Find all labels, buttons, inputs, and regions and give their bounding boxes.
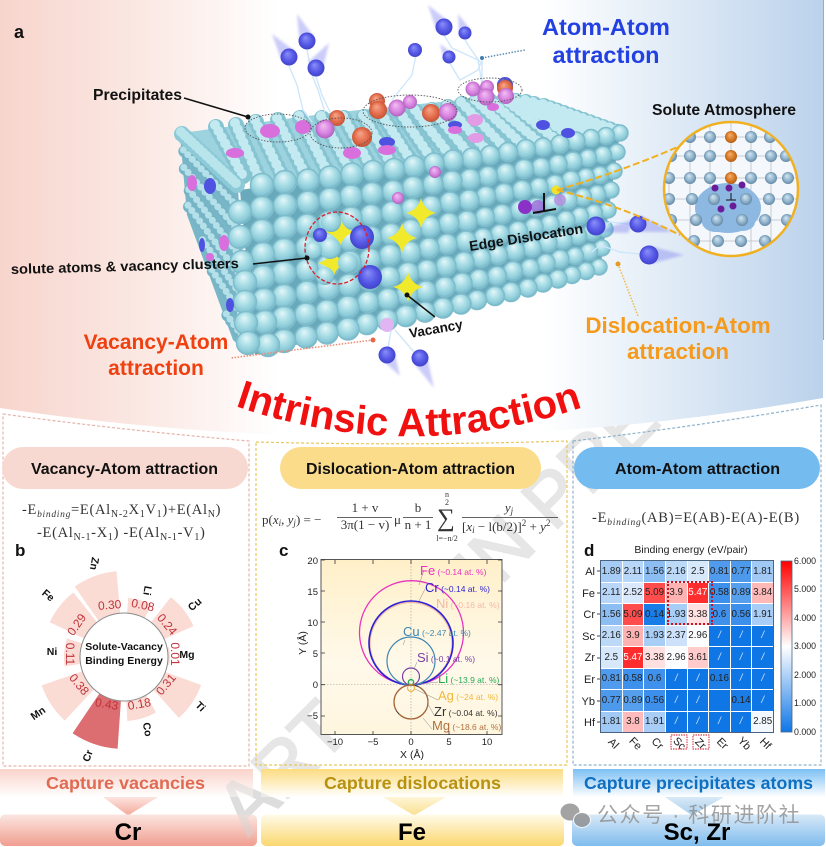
- axis labels: −10: [327, 737, 343, 748]
- formula: Peach-Koehler stress: ) = −: [296, 512, 321, 527]
- heatmap: binding energy matrix: 1.93: [645, 630, 664, 641]
- formula: vacancy binding energy: [22, 502, 221, 543]
- axis labels: 0: [408, 737, 414, 748]
- pill: atom-atom attraction: Atom-Atom attraction: [615, 461, 780, 478]
- formula: vacancy binding energy: 1: [157, 509, 162, 520]
- heatmap: binding energy matrix: /: [696, 716, 699, 727]
- result box: Fe: Fe: [398, 819, 426, 846]
- chart d row labels: Sc: [582, 631, 595, 643]
- result box: Sc, Zr: [572, 814, 825, 846]
- label: vacancy with leader: Vacancy: [408, 317, 464, 341]
- panel label c: c: [279, 541, 288, 560]
- formula: Peach-Koehler stress: 3π(1 − v): [341, 517, 389, 532]
- axis labels: 10: [307, 618, 318, 629]
- contour labels: Li (~13.9 at. %): [438, 671, 500, 686]
- contour labels: Mg (~18.6 at. %): [432, 718, 501, 733]
- capture banner: precipitates atoms: Capture precipitates atoms: [584, 773, 813, 793]
- solute atmosphere inset: [557, 102, 800, 260]
- heatmap: binding energy matrix: 5.47: [623, 652, 642, 663]
- axis labels: 0: [313, 680, 318, 691]
- pill: dislocation-atom attraction: [280, 447, 541, 489]
- contour labels: Ag (~24 at. %): [438, 688, 498, 703]
- heatmap: binding energy matrix: 1.91: [645, 716, 664, 727]
- chart d title: Binding energy (eV/pair): [634, 544, 748, 556]
- formula: atom-atom binding energy: binding: [607, 518, 641, 528]
- axis labels: 15: [307, 587, 318, 598]
- heatmap: binding energy matrix: /: [740, 652, 742, 663]
- element labels: [29, 556, 208, 764]
- element labels: Mg: [179, 649, 195, 661]
- formula: vacancy binding energy: -E(Al: [37, 525, 74, 541]
- contour labels: Cu (~2.47 at. %): [403, 624, 471, 639]
- heatmap: binding energy matrix: 1.81: [753, 566, 772, 577]
- contour labels: Ni (~0.16 at. %): [436, 596, 500, 611]
- highlight box: Sc and Zr with Fe and Cr: [667, 581, 713, 625]
- heatmap: binding energy matrix: 0.89: [623, 695, 642, 706]
- element labels: Cr: [81, 748, 96, 764]
- chart d row labels: Yb: [582, 696, 595, 708]
- heatmap: binding energy matrix: /: [718, 630, 721, 641]
- formula: Peach-Koehler stress: 2: [522, 518, 526, 528]
- heatmap: binding energy matrix: 0.56: [732, 609, 751, 620]
- formula: vacancy binding energy: 1: [108, 532, 114, 543]
- contour labels: Cr (~0.14 at. %): [425, 580, 490, 595]
- axis labels: 5: [313, 649, 318, 660]
- heatmap: binding energy matrix: 0.81: [602, 673, 621, 684]
- heatmap: binding energy matrix: 0.58: [710, 587, 729, 598]
- formula: vacancy binding energy: N-1: [74, 532, 91, 543]
- heatmap: binding energy matrix: 1.93: [667, 609, 686, 620]
- pill: dislocation-atom attraction: Dislocation-Atom attraction: [306, 461, 515, 478]
- chart d row labels: [582, 566, 600, 729]
- axis labels: 20: [307, 556, 318, 567]
- heatmap: binding energy matrix: [600, 560, 774, 733]
- formula: Peach-Koehler stress: y: [538, 519, 546, 534]
- label: precipitates with leader: Precipitates: [93, 87, 182, 104]
- heatmap: binding energy matrix: /: [696, 673, 699, 684]
- center label: Binding Energy: [85, 655, 163, 667]
- heatmap: binding energy matrix: 2.16: [602, 630, 621, 641]
- heatmap: binding energy matrix: 0.77: [602, 695, 621, 706]
- left edge ridge: [181, 132, 240, 188]
- heatmap: binding energy matrix: 0.14: [645, 609, 664, 620]
- heatmap: binding energy matrix: /: [761, 673, 764, 684]
- heatmap: binding energy matrix: 2.96: [667, 652, 686, 663]
- element labels: Co: [140, 722, 154, 737]
- vacancy cluster dashed circle: [305, 212, 369, 284]
- chart d column labels: Al: [605, 736, 621, 752]
- heatmap: binding energy matrix: 2.37: [667, 630, 686, 641]
- value labels: 0.11: [63, 643, 77, 666]
- pill: vacancy-atom attraction: [2, 447, 248, 489]
- chart d colorbar: 3.000: [794, 641, 816, 651]
- heatmap: binding energy matrix: /: [761, 695, 764, 706]
- chart d column labels: Hf: [757, 736, 774, 753]
- chart d row labels: Zr: [585, 652, 595, 664]
- formula: vacancy binding energy: N: [208, 509, 216, 520]
- axis ticks: [321, 560, 502, 735]
- heatmap: binding energy matrix: 5.47: [688, 587, 707, 598]
- formula: Peach-Koehler stress: ∑: [437, 505, 455, 532]
- heatmap: binding energy matrix: 1.89: [602, 566, 621, 577]
- label: vacancy with leader: [404, 292, 464, 341]
- axis labels: Y (Å): [296, 631, 309, 655]
- formula: vacancy binding energy: 1: [140, 509, 145, 520]
- panel a: background with curved bottom: [0, 0, 823, 437]
- heatmap: binding energy matrix: 2.11: [602, 587, 620, 598]
- formula: vacancy binding energy: V: [145, 502, 157, 518]
- chart d row labels: Cr: [583, 609, 595, 621]
- formula: Peach-Koehler stress: b: [415, 500, 421, 515]
- heatmap: binding energy matrix: 1.56: [645, 566, 664, 577]
- value labels: 0.30: [97, 597, 122, 613]
- vacancy stars: [318, 198, 436, 302]
- precipitate atoms above surface: [316, 77, 514, 147]
- heatmap: binding energy matrix: 3.8: [626, 716, 640, 727]
- element labels: Ni: [47, 646, 57, 658]
- chart c: dislocation interaction contours: [296, 556, 502, 761]
- value labels: 0.18: [127, 695, 152, 713]
- formula: Peach-Koehler stress: j: [510, 506, 514, 516]
- element labels: Zn: [87, 556, 101, 571]
- watermark: article in press: ARTICLE IN PRESS: [200, 305, 745, 847]
- heatmap: binding energy matrix: 0.56: [645, 695, 664, 706]
- chart d row labels: Er: [584, 674, 595, 686]
- chart d colorbar: [781, 556, 816, 737]
- heatmap: binding energy matrix: 3.84: [753, 587, 772, 598]
- heatmap: binding energy matrix: 0.16: [710, 673, 729, 684]
- center label: Solute-Vacancy: [85, 641, 163, 653]
- solute atoms on surfaces: [187, 103, 575, 312]
- formula: atom-atom binding energy: (AB)=E(AB)-E(A)-E(B): [641, 510, 800, 526]
- heatmap: binding energy matrix: 2.5: [604, 652, 618, 663]
- chart d row labels: Fe: [582, 588, 595, 600]
- formula: vacancy binding energy: -V: [178, 525, 194, 541]
- dotted connectors: [231, 50, 638, 358]
- panel: vacancy-atom frame: [3, 414, 249, 766]
- panel: dislocation-atom frame: [256, 441, 567, 765]
- chart d column labels: [605, 735, 774, 753]
- heatmap: binding energy matrix: 0.81: [710, 566, 729, 577]
- main title: Intrinsic Attraction: Intrinsic Attraction: [238, 380, 580, 436]
- heading: atom-atom attraction: Atom-Atom: [542, 14, 670, 40]
- chart d row labels: Al: [585, 566, 595, 578]
- pill: vacancy-atom attraction: Vacancy-Atom attraction: [31, 461, 218, 478]
- heatmap: binding energy matrix: 3.38: [645, 652, 664, 663]
- formula: Peach-Koehler stress: 2: [445, 498, 449, 507]
- formula: vacancy binding energy: ): [216, 502, 221, 518]
- heading: dislocation-atom attraction: attraction: [627, 339, 729, 364]
- chart d row labels: Hf: [584, 717, 596, 729]
- formula: Peach-Koehler stress: − l(: [475, 519, 496, 534]
- result box: Sc, Zr: Sc, Zr: [664, 819, 730, 846]
- contour labels: Fe (~0.14 at. %): [420, 563, 487, 578]
- heatmap: binding energy matrix: /: [675, 695, 678, 706]
- heatmap: binding energy matrix: 5.09: [623, 609, 642, 620]
- formula: Peach-Koehler stress: y: [505, 500, 511, 515]
- formula: Peach-Koehler stress: i: [472, 525, 475, 535]
- front face atoms: [228, 125, 628, 356]
- formula: Peach-Koehler stress: n + 1: [405, 517, 431, 532]
- heatmap: binding energy matrix: 1.91: [753, 609, 772, 620]
- formula: vacancy binding energy: X: [129, 502, 140, 518]
- formula: Peach-Koehler stress: n: [445, 490, 449, 499]
- capture banner: precipitates atoms: [573, 769, 825, 816]
- heatmap: binding energy matrix: /: [718, 716, 721, 727]
- heatmap: binding energy matrix: 0.6: [713, 609, 726, 620]
- formula: vacancy binding energy: 1: [194, 532, 200, 543]
- chart d column labels: Zr: [692, 736, 708, 752]
- capture banner: dislocations: [261, 769, 563, 816]
- panel label d: d: [584, 541, 594, 560]
- formula: Peach-Koehler stress: i: [279, 518, 282, 528]
- wedges: [42, 571, 201, 749]
- heatmap: binding energy matrix: 3.9: [626, 630, 640, 641]
- panel: atom-atom frame: [573, 405, 821, 765]
- heatmap: binding energy matrix: /: [675, 716, 678, 727]
- chart d colorbar: 0.000: [794, 727, 816, 737]
- heatmap: binding energy matrix: /: [675, 673, 678, 684]
- value labels: 0.29: [64, 611, 89, 638]
- value labels: 0.01: [168, 642, 182, 666]
- center circle: [80, 613, 168, 701]
- formula: vacancy binding energy: -X: [91, 525, 108, 541]
- formula: vacancy binding energy: ) -E(Al: [114, 525, 160, 541]
- element labels: Fe: [39, 587, 57, 604]
- formula: atom-atom binding energy: -E: [592, 510, 607, 526]
- heading: atom-atom attraction: attraction: [552, 42, 660, 68]
- pill: atom-atom attraction: [574, 447, 820, 489]
- value labels: 0.31: [153, 671, 179, 698]
- capture banner: dislocations: Capture dislocations: [324, 773, 501, 793]
- right edge line: [822, 0, 824, 340]
- formula: vacancy binding energy: ): [200, 525, 206, 541]
- value labels: 0.24: [154, 611, 180, 638]
- element labels: Mn: [29, 704, 48, 723]
- element labels: Cu: [186, 596, 204, 614]
- formula: Peach-Koehler stress: 2: [546, 518, 550, 528]
- element labels: Ti: [193, 699, 208, 714]
- atom block: lattice of atoms: [180, 5, 684, 388]
- heatmap: binding energy matrix: 1.81: [602, 716, 621, 727]
- axis labels: [296, 556, 492, 761]
- heatmap: binding energy matrix: /: [740, 716, 742, 727]
- panel label b: b: [15, 541, 25, 560]
- heatmap: binding energy matrix: /: [696, 695, 699, 706]
- chart d colorbar: 1.000: [794, 698, 816, 708]
- heatmap: binding energy matrix: 3.38: [688, 609, 707, 620]
- axis labels: 10: [482, 737, 492, 748]
- element labels: Li: [140, 585, 154, 596]
- capture banner: vacancies: Capture vacancies: [46, 773, 205, 793]
- free blue atoms with tails: [272, 5, 684, 388]
- heatmap: binding energy matrix: 2.96: [688, 630, 707, 641]
- top face of lattice: [215, 98, 620, 185]
- formula: Peach-Koehler stress: j: [292, 518, 296, 528]
- heatmap: binding energy matrix: /: [740, 630, 742, 641]
- heading: vacancy-atom attraction: Vacancy-Atom: [84, 331, 228, 354]
- heatmap: binding energy matrix: /: [761, 652, 764, 663]
- lattice backing: [180, 98, 620, 355]
- label: solute atoms and vacancy clusters with leader: solute atoms & vacancy clusters: [11, 255, 239, 277]
- chart d column labels: Cr: [649, 736, 666, 752]
- formula: vacancy binding energy: =E(Al: [71, 502, 111, 518]
- heatmap: binding energy matrix: 1.56: [602, 609, 621, 620]
- formula: Peach-Koehler stress: μ: [394, 512, 401, 527]
- edge dislocation symbol: [533, 193, 556, 213]
- formula: Peach-Koehler stress: [x: [462, 519, 472, 534]
- chart d column labels: Fe: [626, 735, 644, 753]
- watermark overlay on banners: A: [200, 755, 295, 847]
- contour labels: Zr (~0.04 at. %): [434, 704, 498, 719]
- atoms inside vacancy cluster: [304, 212, 358, 285]
- formula: vacancy binding energy: N-1: [160, 532, 178, 543]
- heading: dislocation-atom attraction: Dislocation-Atom: [585, 313, 771, 338]
- value labels: 0.08: [130, 596, 156, 614]
- heatmap: binding energy matrix: 2.11: [624, 566, 642, 577]
- chart d colorbar: 5.000: [794, 584, 816, 594]
- formula: Peach-Koehler stress: +: [526, 519, 540, 534]
- label: edge dislocation: Edge Dislocation: [468, 220, 584, 254]
- axis labels: −5: [307, 711, 318, 722]
- formula: vacancy binding energy: N-2: [111, 509, 129, 520]
- formula: Peach-Koehler stress: ,: [281, 512, 288, 527]
- capture banner: vacancies: [0, 769, 253, 816]
- axis labels: −5: [368, 737, 378, 748]
- heatmap: binding energy matrix: 0.6: [648, 673, 661, 684]
- formula: vacancy binding energy: binding: [37, 510, 71, 520]
- formula: Peach-Koehler stress: l=−n/2: [436, 534, 458, 543]
- heatmap: binding energy matrix: 3.61: [688, 652, 707, 663]
- axis labels: 5: [446, 737, 452, 748]
- heatmap: binding energy matrix: 2.52: [623, 587, 642, 598]
- axis labels: X (Å): [400, 748, 424, 761]
- formula: Peach-Koehler stress: 1 + v: [352, 500, 379, 515]
- formula: Peach-Koehler stress: y: [286, 512, 294, 527]
- contour labels: [403, 563, 501, 733]
- heatmap: binding energy matrix: /: [718, 652, 721, 663]
- chart d column labels: Er: [714, 736, 730, 752]
- heatmap: binding energy matrix: 5.09: [645, 587, 664, 598]
- precipitate dotted ellipses: [245, 78, 522, 148]
- chart d colorbar: 6.000: [794, 556, 816, 566]
- value labels: [63, 596, 182, 713]
- heatmap: binding energy matrix: 2.85: [753, 716, 772, 727]
- contour labels: Si (~0.1 at. %): [417, 650, 475, 665]
- formula: Peach-Koehler stress: [262, 490, 558, 543]
- wechat watermark: 公众号 · 科研进阶社: [597, 804, 801, 827]
- heatmap: binding energy matrix: /: [761, 630, 764, 641]
- heading: vacancy-atom attraction: attraction: [108, 357, 204, 380]
- formula: Peach-Koehler stress: b/2)]: [496, 519, 522, 534]
- chart d column labels: Yb: [735, 735, 753, 753]
- heatmap: binding energy matrix: 2.16: [667, 566, 686, 577]
- label: precipitates with leader: [93, 87, 250, 120]
- formula: Peach-Koehler stress: p(x: [262, 512, 279, 527]
- heatmap: binding energy matrix: 0.77: [732, 566, 751, 577]
- result box: Cr: Cr: [115, 819, 141, 846]
- chart d column labels: Sc: [670, 735, 688, 753]
- heatmap: binding energy matrix: 0.14: [732, 695, 751, 706]
- attraction lightning lines: [289, 35, 649, 352]
- chart b: polar binding energy: [29, 556, 208, 764]
- chart d colorbar: 4.000: [794, 613, 816, 623]
- formula: vacancy binding energy: )+E(Al: [162, 502, 208, 518]
- value labels: 0.43: [94, 695, 120, 713]
- heatmap: binding energy matrix: 3.9: [669, 587, 683, 598]
- heatmap: binding energy matrix: 0.58: [623, 673, 642, 684]
- heatmap: binding energy matrix: 0.89: [732, 587, 751, 598]
- left face of lattice: [182, 148, 246, 342]
- heatmap: binding energy matrix: 2.5: [691, 566, 705, 577]
- solute atmosphere inset: Solute Atmosphere: [652, 102, 796, 119]
- panel label a: a: [14, 22, 25, 42]
- heatmap: binding energy matrix: /: [740, 673, 742, 684]
- value labels: 0.38: [66, 671, 92, 698]
- result box: Fe: [261, 814, 564, 846]
- formula: vacancy binding energy: -E: [22, 502, 37, 518]
- result box: Cr: [0, 814, 257, 846]
- contour circles: [360, 570, 464, 729]
- chart d colorbar: 2.000: [794, 670, 816, 680]
